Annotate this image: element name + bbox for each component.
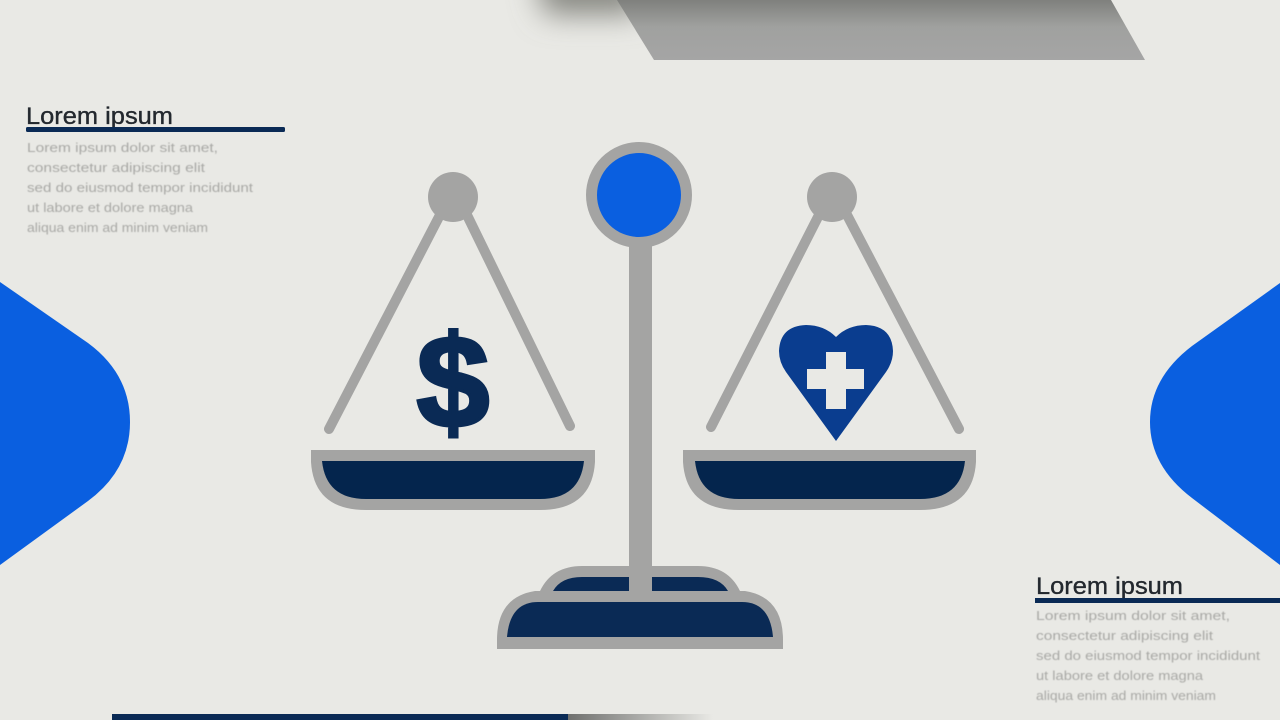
body text: top left: consectetur adipiscing elit xyxy=(27,160,205,175)
scale base xyxy=(497,566,783,649)
icon: heart with cross xyxy=(779,325,893,441)
left suspension arms xyxy=(329,213,570,429)
right pan xyxy=(683,450,976,510)
left pan assembly xyxy=(311,172,595,510)
body text: top left: sed do eiusmod tempor incididunt xyxy=(27,180,253,195)
right hanger knob xyxy=(807,172,857,222)
body text: top left: aliqua enim ad minim veniam xyxy=(27,220,208,235)
body text: bottom right: aliqua enim ad minim veniam xyxy=(1036,688,1216,703)
left hanger knob xyxy=(428,172,478,222)
right suspension arms xyxy=(711,213,959,429)
body text: bottom right: Lorem ipsum dolor sit amet, xyxy=(1036,608,1230,623)
text block: bottom right xyxy=(1035,573,1280,703)
heading rule: bottom right xyxy=(1035,598,1280,603)
body text: top left xyxy=(27,140,253,235)
heading: bottom right: Lorem ipsum xyxy=(1036,573,1183,600)
text block: top left xyxy=(26,103,285,235)
body text: top left: ut labore et dolore magna xyxy=(27,200,194,215)
body text: bottom right xyxy=(1036,608,1260,703)
bottom strip xyxy=(112,714,713,720)
body text: bottom right: ut labore et dolore magna xyxy=(1036,668,1204,683)
right pan assembly xyxy=(683,172,976,510)
body text: bottom right: sed do eiusmod tempor incididunt xyxy=(1036,648,1260,663)
balance scale xyxy=(311,148,976,649)
scale post xyxy=(629,240,652,598)
body text: top left: Lorem ipsum dolor sit amet, xyxy=(27,140,218,155)
left pan xyxy=(311,450,595,510)
top grey parallelogram xyxy=(617,0,1145,60)
top shadow smear xyxy=(535,0,640,14)
icon: dollar sign: $ xyxy=(417,308,489,455)
left blue side shape xyxy=(0,282,130,565)
heading: top left: Lorem ipsum xyxy=(26,103,173,130)
body text: bottom right: consectetur adipiscing elit xyxy=(1036,628,1213,643)
pivot circle xyxy=(592,148,686,242)
right blue side shape xyxy=(1150,283,1280,565)
heading rule: top left xyxy=(26,127,285,132)
